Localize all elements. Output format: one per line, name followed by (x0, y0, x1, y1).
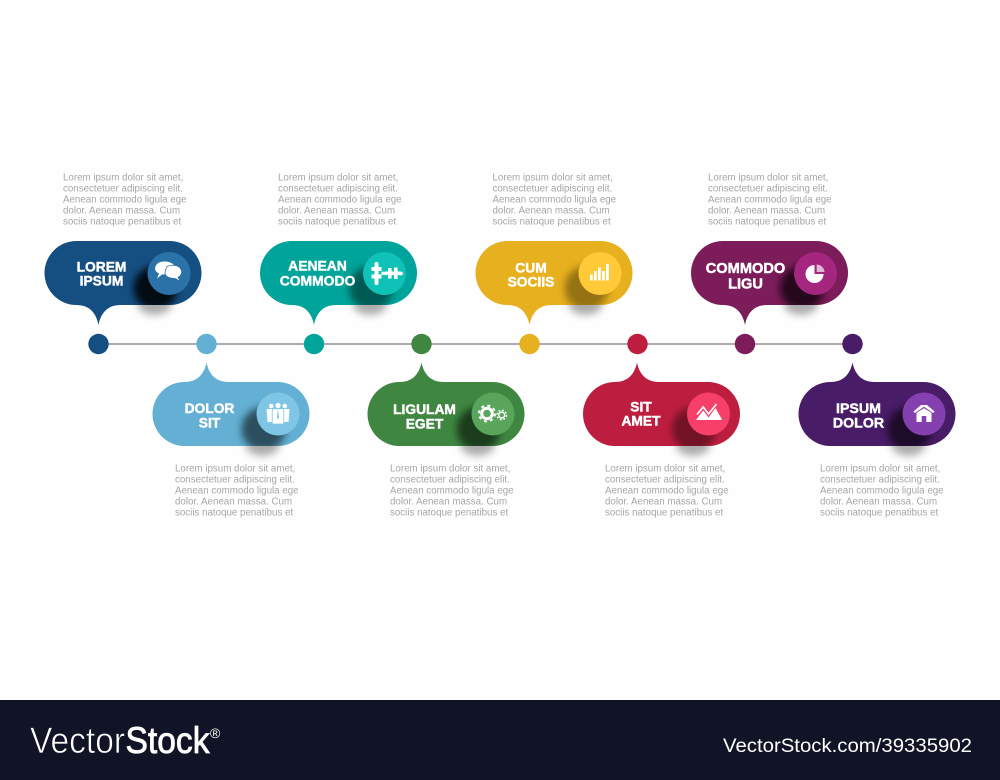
panel: step 8 Ipsum Dolor (798, 362, 956, 456)
text block: step 5: Lorem ipsum dolor sit amet, (492, 173, 613, 184)
panel: step 4 Ligulam Eget (368, 362, 524, 456)
text block: step 7: dolor. Aenean massa. Cum (708, 205, 825, 216)
text block: step 2: consectetuer adipiscing elit. (175, 475, 295, 486)
text block: step 4: consectetuer adipiscing elit. (390, 475, 510, 486)
text block: step 3: Aenean commodo ligula ege (278, 194, 402, 206)
timeline axis (98, 343, 853, 345)
text block: step 1: consectetuer adipiscing elit. (63, 184, 183, 195)
text block: step 1: Aenean commodo ligula ege (63, 194, 187, 206)
text block: step 2: dolor. Aenean massa. Cum (175, 496, 292, 507)
text block: step 7: consectetuer adipiscing elit. (708, 184, 828, 195)
image id: VectorStock.com/39335902 (723, 736, 972, 757)
timeline dots (88, 334, 863, 354)
text block: step 4: sociis natoque penatibus et (390, 507, 508, 518)
heading: LIGU (728, 276, 763, 292)
text block: step 7: Lorem ipsum dolor sit amet, (708, 173, 828, 184)
panel: step 3 Aenean Commodo (260, 241, 417, 325)
heading: COMMODO (280, 272, 356, 288)
text block: step 6: sociis natoque penatibus et (605, 507, 723, 518)
text block: step 8: Aenean commodo ligula ege (820, 486, 944, 496)
heading: LIGULAM (393, 402, 456, 417)
heading: DOLOR (833, 416, 884, 432)
text block: step 7: Aenean commodo ligula ege (708, 194, 832, 206)
text block: step 3: sociis natoque penatibus et (278, 216, 396, 227)
heading: IPSUM (80, 274, 123, 288)
heading: EGET (406, 416, 444, 431)
text block: step 1: sociis natoque penatibus et (63, 216, 181, 227)
heading: SOCIIS (508, 274, 554, 290)
text block: step 6: Aenean commodo ligula ege (605, 486, 729, 496)
text block: step 5: consectetuer adipiscing elit. (492, 184, 612, 195)
text block: step 8: sociis natoque penatibus et (820, 507, 938, 518)
text block: step 2: Aenean commodo ligula ege (175, 486, 299, 496)
heading: DOLOR (185, 401, 234, 416)
heading: SIT (630, 400, 652, 415)
text block: step 1: dolor. Aenean massa. Cum (63, 205, 180, 216)
text block: step 3: consectetuer adipiscing elit. (278, 184, 398, 195)
text block: step 5: sociis natoque penatibus et (492, 216, 611, 227)
text block: step 5: dolor. Aenean massa. Cum (492, 205, 610, 216)
text block: step 4: Aenean commodo ligula ege (390, 486, 514, 496)
text block: step 3: Lorem ipsum dolor sit amet, (278, 173, 398, 184)
text block: step 8: Lorem ipsum dolor sit amet, (820, 464, 940, 475)
text block: step 6: Lorem ipsum dolor sit amet, (605, 464, 725, 475)
text block: step 1: Lorem ipsum dolor sit amet, (63, 173, 183, 184)
icon: puzzle pieces (372, 262, 403, 285)
text block: step 2: Lorem ipsum dolor sit amet, (175, 464, 295, 475)
text block: step 6: dolor. Aenean massa. Cum (605, 496, 722, 507)
footer band (0, 700, 1000, 780)
heading: AMET (621, 414, 661, 429)
icon: bar chart (590, 264, 609, 280)
heading: AENEAN (288, 258, 347, 274)
icon: house (914, 405, 934, 422)
text block: step 8: dolor. Aenean massa. Cum (820, 496, 937, 507)
text block: step 7: sociis natoque penatibus et (708, 216, 826, 227)
logo wordmark: Stock: Stock (126, 720, 210, 761)
panel: step 1 Lorem Ipsum (44, 241, 202, 325)
text block: step 4: Lorem ipsum dolor sit amet, (390, 464, 510, 475)
text block: step 8: consectetuer adipiscing elit. (820, 475, 940, 486)
panel: step 2 Dolor Sit (152, 362, 310, 456)
panel: step 6 Sit Amet (583, 362, 740, 456)
icon: mountains with trend line (696, 404, 722, 420)
icon: gears (479, 406, 506, 422)
heading: CUM (515, 260, 547, 276)
panel: step 5 Cum Sociis (476, 241, 632, 325)
heading: COMMODO (706, 261, 785, 277)
text block: step 6: consectetuer adipiscing elit. (605, 475, 725, 486)
heading: LOREM (77, 260, 126, 274)
text block: step 3: dolor. Aenean massa. Cum (278, 205, 395, 216)
text block: step 5: Aenean commodo ligula ege (492, 194, 616, 206)
logo wordmark: Vector: Vector (30, 720, 125, 761)
panel: step 7 Commodo Ligu (691, 241, 848, 325)
icon: speech bubbles (155, 262, 182, 282)
heading: IPSUM (836, 401, 881, 417)
logo registered mark: ® (210, 725, 221, 741)
icon: pie chart (806, 264, 824, 283)
heading: SIT (199, 415, 221, 430)
text block: step 2: sociis natoque penatibus et (175, 507, 293, 518)
text block: step 4: dolor. Aenean massa. Cum (390, 496, 507, 507)
icon: team of people (266, 403, 290, 424)
